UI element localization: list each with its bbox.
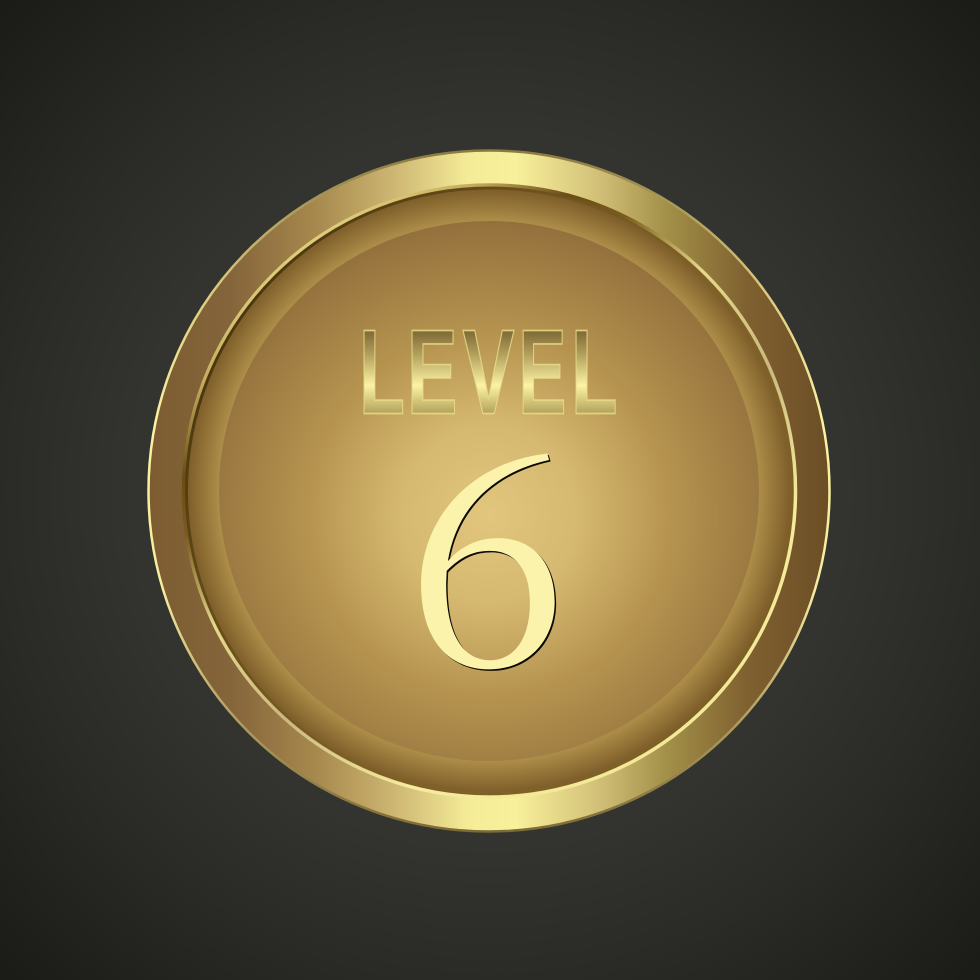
- medal: [148, 150, 830, 832]
- heading: LEVEL: E: [518, 304, 566, 440]
- outer ring edge highlight: [148, 150, 830, 832]
- central disc: [219, 221, 759, 761]
- inner band: [186, 188, 792, 794]
- heading: LEVEL: V: [462, 304, 514, 440]
- heading: LEVEL: E: [407, 304, 458, 440]
- numeral: 6: 6: [408, 328, 571, 752]
- numeral: 6: 6: [407, 326, 569, 750]
- heading: LEVEL: L: [571, 304, 618, 440]
- inner rim highlight: [184, 185, 796, 797]
- heading: LEVEL: [359, 304, 618, 440]
- heading: LEVEL: L: [359, 304, 405, 440]
- outer gold ring: [148, 150, 830, 832]
